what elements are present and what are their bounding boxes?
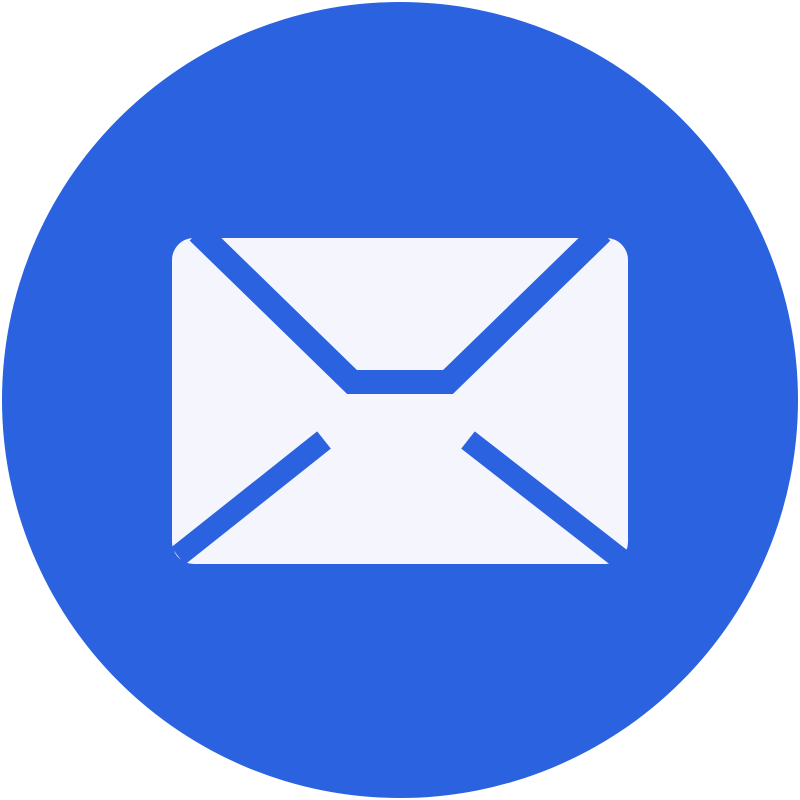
- icon: envelope: [172, 232, 628, 564]
